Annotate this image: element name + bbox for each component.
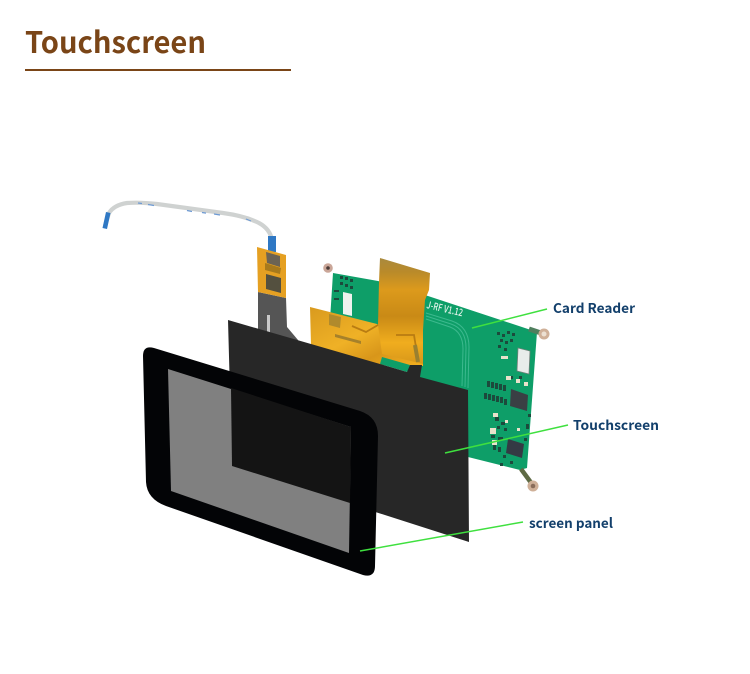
screw: top left: [323, 263, 333, 273]
black display panel: [228, 320, 469, 542]
chip: lower: [506, 439, 524, 458]
board components: [334, 276, 531, 466]
screw: bottom: [521, 469, 538, 492]
label: card reader: Card Reader: [553, 297, 635, 317]
label: screen panel: screen panel: [529, 512, 613, 532]
touch controller flex connector: [257, 247, 300, 348]
leader line: card reader: [472, 309, 547, 328]
chip: upper: [510, 389, 528, 411]
title: Touchscreen: [25, 20, 206, 62]
flexible printed circuits: [310, 258, 430, 372]
leader line: screen panel: [360, 522, 523, 551]
antenna traces: [426, 313, 469, 388]
connector: top right: [517, 348, 530, 374]
green circuit board: [323, 263, 550, 492]
flex tab: green: [380, 357, 410, 372]
leader line: touchscreen: [445, 425, 568, 453]
panel seen through glass: [231, 388, 351, 503]
connector: top left: [343, 292, 352, 316]
screw: top right: [529, 328, 550, 340]
glass viewing area: [168, 369, 351, 553]
front glass panel: [143, 347, 378, 576]
board version label: J-RF V1.12: [425, 296, 465, 319]
ribbon cable: [102, 203, 276, 252]
flex contact fingers: [329, 314, 341, 328]
label: touchscreen: Touchscreen: [573, 414, 659, 434]
flex: lower wide strip: [310, 307, 423, 366]
flex: tall strip: [378, 258, 430, 364]
